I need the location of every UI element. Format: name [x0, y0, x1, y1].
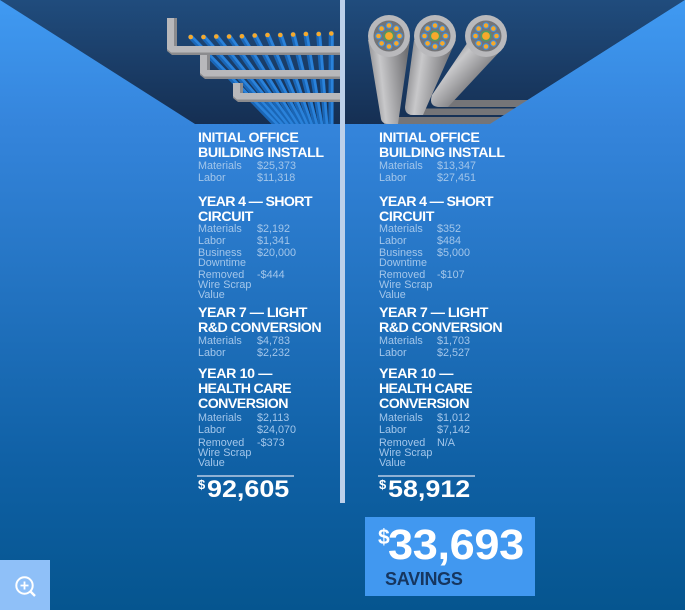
callout: savings — [365, 517, 535, 596]
section: year 4: $1,341 — [257, 235, 290, 247]
section: initial install: $25,373 — [257, 160, 296, 172]
section: year 4: YEAR 4 — SHORT — [198, 194, 312, 210]
section: year 4: Labor — [198, 235, 226, 247]
section: year 10: YEAR 10 — — [198, 366, 272, 382]
section: initial install: Labor — [198, 172, 226, 184]
section: year 4: $5,000 — [437, 247, 470, 259]
savings amount: 33,693 — [388, 521, 524, 569]
section: year 10 — [198, 366, 296, 469]
section: year 7: Materials — [379, 335, 423, 347]
section: year 10: CONVERSION — [379, 396, 469, 412]
copper wires illustration — [167, 18, 340, 126]
section: year 4: Removed — [198, 269, 244, 281]
total: fiber: 58,912 — [388, 476, 470, 503]
section: year 4: YEAR 4 — SHORT — [379, 194, 493, 210]
section: year 10: Materials — [379, 412, 423, 424]
section: year 4: CIRCUIT — [198, 209, 253, 225]
section: year 7 — [379, 305, 502, 359]
total: fiber: $ — [379, 477, 386, 492]
section: year 10: Value — [198, 457, 225, 469]
section: year 4: -$444 — [257, 269, 285, 281]
total: copper: 92,605 — [207, 476, 289, 503]
section: year 7: Labor — [198, 347, 226, 359]
section: year 7: YEAR 7 — LIGHT — [379, 305, 488, 321]
section: year 4: $2,192 — [257, 223, 290, 235]
section: year 7: $1,703 — [437, 335, 470, 347]
section: initial install: Labor — [379, 172, 407, 184]
left column: copper costs — [197, 130, 324, 503]
section: year 10: CONVERSION — [198, 396, 288, 412]
section: initial install: BUILDING INSTALL — [379, 145, 505, 161]
section: year 10: Wire Scrap — [379, 447, 432, 459]
section: year 10: Removed — [379, 437, 425, 449]
right column: fiber costs — [378, 130, 505, 503]
section: year 7: $2,232 — [257, 347, 290, 359]
section: year 7: Labor — [379, 347, 407, 359]
section: year 10: HEALTH CARE — [198, 381, 291, 397]
section: initial install — [198, 130, 324, 184]
section: year 4 — [379, 194, 494, 301]
section: initial install: INITIAL OFFICE — [379, 130, 479, 146]
section: year 4: Value — [198, 289, 225, 301]
section: year 7: R&D CONVERSION — [379, 320, 502, 336]
section: year 10: Removed — [198, 437, 244, 449]
section: year 10 — [379, 366, 472, 469]
section: year 4 — [198, 194, 312, 301]
section: year 4: -$107 — [437, 269, 465, 281]
section: year 4: $20,000 — [257, 247, 296, 259]
section: year 4: $484 — [437, 235, 461, 247]
section: year 4: Materials — [379, 223, 423, 235]
section: year 7: $4,783 — [257, 335, 290, 347]
section: year 10: Value — [379, 457, 406, 469]
section: year 4: Labor — [379, 235, 407, 247]
section: initial install: $13,347 — [437, 160, 476, 172]
section: year 10: Labor — [379, 424, 407, 436]
center divider — [340, 0, 345, 503]
section: year 10: N/A — [437, 437, 455, 449]
section: year 7: Materials — [198, 335, 242, 347]
section: initial install: Materials — [198, 160, 242, 172]
section: year 10: $2,113 — [257, 412, 289, 424]
savings label: SAVINGS — [385, 569, 463, 589]
section: initial install: $27,451 — [437, 172, 476, 184]
section: year 4: Removed — [379, 269, 425, 281]
section: year 4: Downtime — [379, 257, 427, 269]
section: initial install — [379, 130, 505, 184]
section: year 10: Labor — [198, 424, 226, 436]
section: year 4: Business — [379, 247, 423, 259]
section: year 10: -$373 — [257, 437, 285, 449]
section: year 4: $352 — [437, 223, 461, 235]
section: year 4: Materials — [198, 223, 242, 235]
fiber optic cables illustration — [368, 15, 528, 124]
savings amount: $ — [378, 526, 390, 549]
section: initial install: INITIAL OFFICE — [198, 130, 298, 146]
section: year 4: Wire Scrap — [198, 279, 251, 291]
section: year 7: YEAR 7 — LIGHT — [198, 305, 307, 321]
section: year 7 — [198, 305, 321, 359]
section: year 7: R&D CONVERSION — [198, 320, 321, 336]
section: initial install: BUILDING INSTALL — [198, 145, 324, 161]
total: copper: $ — [198, 477, 205, 492]
section: year 10: Materials — [198, 412, 242, 424]
icon: zoom button — [0, 560, 50, 610]
section: year 10: YEAR 10 — — [379, 366, 453, 382]
section: year 4: CIRCUIT — [379, 209, 434, 225]
section: year 10: HEALTH CARE — [379, 381, 472, 397]
section: year 10: $7,142 — [437, 424, 470, 436]
section: year 7: $2,527 — [437, 347, 470, 359]
section: year 4: Value — [379, 289, 406, 301]
section: year 10: $24,070 — [257, 424, 296, 436]
section: year 4: Business — [198, 247, 242, 259]
section: initial install: $11,318 — [257, 172, 295, 184]
section: year 4: Downtime — [198, 257, 246, 269]
section: year 10: Wire Scrap — [198, 447, 251, 459]
section: year 4: Wire Scrap — [379, 279, 432, 291]
section: year 10: $1,012 — [437, 412, 470, 424]
section: initial install: Materials — [379, 160, 423, 172]
